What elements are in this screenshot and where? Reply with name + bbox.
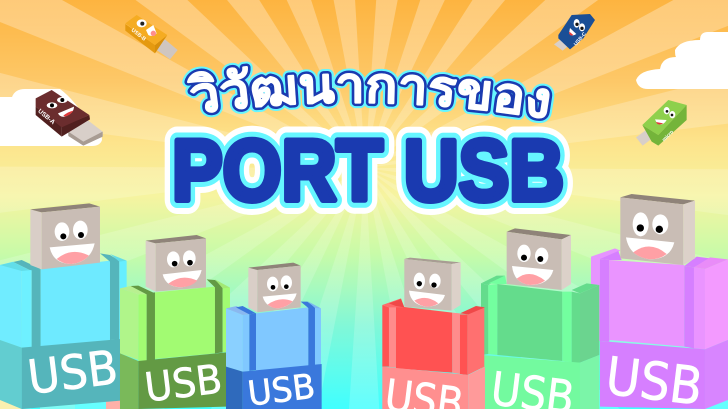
red head (404, 258, 461, 311)
title: PORT USB: PORT USB (172, 123, 564, 219)
cyan head (30, 203, 100, 269)
figure: green USB (120, 235, 230, 409)
title: Thai line: วิวัฒนาการของ (187, 66, 550, 118)
icon: blue USB stick: USB-C (573, 31, 588, 47)
purple head (620, 194, 695, 265)
icon: blue USB stick (554, 14, 595, 51)
figure: blue USB (226, 263, 322, 409)
green head (146, 235, 206, 292)
title: PORT USB: PORT USB (172, 123, 564, 219)
bottom patches (0, 397, 122, 409)
icon: green USB stick (636, 100, 687, 146)
title: Thai line: วิวัฒนาการของ (182, 62, 554, 123)
blue head (248, 263, 301, 312)
icon: USB-B stick (125, 15, 178, 59)
mint head (507, 228, 571, 290)
icon: USB-A stick: USB-A (36, 108, 57, 126)
icon: green USB stick: micro (661, 129, 675, 143)
figure: green-mint USB (481, 228, 599, 409)
cloud left (0, 89, 102, 146)
figure: cyan USB (0, 203, 127, 409)
figure: red USB (382, 258, 485, 409)
cloud right (636, 32, 728, 89)
title: PORT USB: PORT USB (172, 123, 564, 219)
figure: purple USB (591, 194, 728, 409)
icon: USB-A stick (36, 90, 103, 146)
cyan base: USB (25, 340, 121, 406)
title: Thai line: วิวัฒนาการของ (184, 64, 552, 121)
icon: USB-B stick: USB-B (130, 28, 147, 43)
